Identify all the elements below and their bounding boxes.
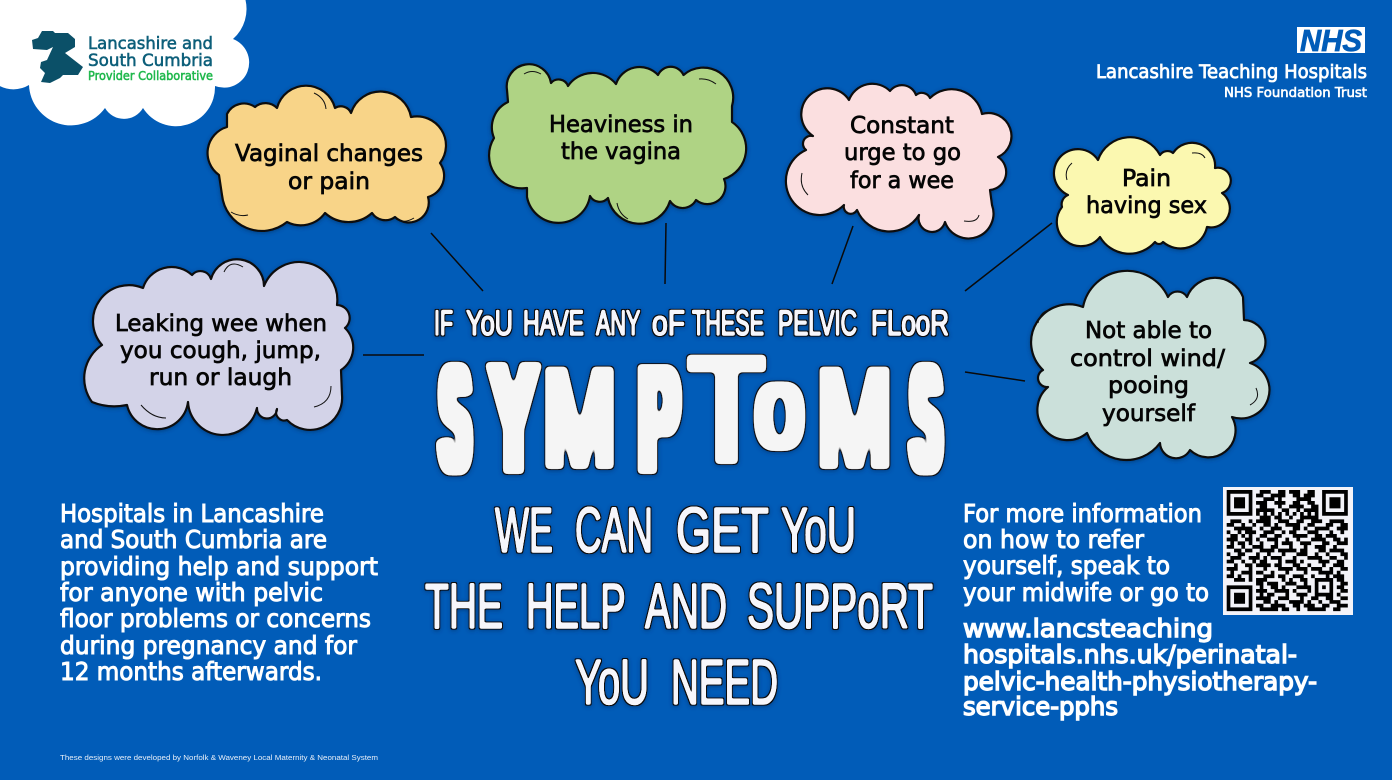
bubble: pain having sex: having sex: [1086, 191, 1207, 219]
heading: if you have any of these pelvic floor: PELVIC: [778, 304, 857, 343]
text block: website address: hospitals.nhs.uk/perinatal-: [963, 640, 1297, 669]
bubble: not able to control wind / pooing yourself: pooing: [1108, 371, 1189, 399]
QR code: [1223, 487, 1353, 615]
trust name: Lancashire Teaching Hospitals: [1096, 61, 1367, 83]
message: we can get you the help and support you need: YoU: [575, 646, 649, 718]
message: we can get you the help and support you need: CAN: [575, 494, 653, 566]
connector lines: [363, 223, 1052, 381]
bubble: leaking wee: run or laugh: [149, 363, 292, 391]
heading: if you have any of these pelvic floor: HAVE: [523, 304, 584, 343]
bubble: constant urge to go for a wee: for a wee: [850, 166, 954, 194]
bubble: pain having sex: Pain: [1122, 164, 1171, 192]
message: we can get you the help and support you need: NEED: [671, 646, 778, 718]
bubble: leaking wee: you cough, jump,: [120, 336, 321, 364]
heading: if you have any of these pelvic floor: IF: [434, 304, 453, 343]
text block: website address: service-pphs: [963, 692, 1118, 721]
logo text: Provider Collaborative: [88, 68, 213, 83]
message: we can get you the help and support you need: AND: [645, 570, 727, 642]
message: we can get you the help and support you need: YoU: [781, 494, 856, 566]
text block: hospitals help and support: 12 months afterwards.: [60, 657, 322, 686]
bubble: heaviness in the vagina: Heaviness in: [549, 110, 693, 138]
logo: Lancashire and South Cumbria Provider Collaborative: [0, 0, 249, 126]
heading: symptoms: P: [639, 334, 679, 503]
logo text: South Cumbria: [88, 51, 213, 70]
bubble: not able to control wind / pooing yourself: control wind/: [1070, 344, 1225, 372]
bubble: constant urge to go for a wee: [786, 84, 1011, 238]
footnote: These designs were developed by Norfolk & Waveney Local Maternity & Neonatal System: [60, 753, 378, 762]
heading: symptoms: T: [690, 325, 763, 493]
text block: more information: your midwife or go to: [963, 578, 1209, 607]
message: we can get you the help and support you need: GET: [676, 494, 768, 566]
text: S: [911, 334, 941, 504]
text block: more information: For more information: [963, 499, 1202, 528]
heading: if you have any of these pelvic floor: YoU: [466, 304, 513, 343]
bubble: constant urge to go for a wee: urge to go: [844, 138, 961, 166]
bubble: vaginal changes or pain: Vaginal changes: [235, 139, 423, 167]
bubble: vaginal changes or pain: or pain: [288, 167, 370, 195]
text block: hospitals help and support: [60, 499, 378, 686]
heading: symptoms: o: [756, 342, 803, 472]
bubble: not able to control wind / pooing yourself: [1031, 271, 1269, 460]
bubble: pain having sex: [1054, 137, 1231, 254]
bubble: leaking wee: Leaking wee when: [115, 309, 327, 337]
heading: if you have any of these pelvic floor: oF: [652, 304, 685, 343]
bubble: heaviness in the vagina: the vagina: [561, 137, 681, 165]
heading: symptoms: M: [818, 339, 891, 496]
text block: website address: [963, 614, 1317, 721]
logo: NHS Lancashire Teaching Hospitals: [1096, 23, 1367, 101]
icon: region map: [32, 31, 83, 83]
trust subtitle: NHS Foundation Trust: [1224, 85, 1367, 101]
heading: symptoms: M: [544, 339, 615, 496]
bubble: leaking wee: [84, 259, 353, 435]
message: we can get you the help and support you need: THE: [425, 570, 503, 642]
bubble: vaginal changes or pain: [208, 86, 446, 231]
heading: if you have any of these pelvic floor: ANY: [596, 304, 640, 343]
text block: more information: yourself, speak to: [963, 551, 1170, 580]
bubble: heaviness in the vagina: [489, 64, 746, 224]
text block: hospitals help and support: floor problems or concerns: [60, 604, 371, 633]
text block: hospitals help and support: and South Cumbria are: [60, 525, 327, 554]
message: we can get you the help and support you need: HELP: [526, 570, 625, 642]
logo text: [88, 34, 213, 83]
heading: symptoms: Y: [490, 332, 537, 504]
logo text: Lancashire and: [88, 34, 213, 53]
bubble: not able to control wind / pooing yourself: yourself: [1102, 399, 1196, 427]
NHS lozenge: [1297, 27, 1365, 53]
bubble: not able to control wind / pooing yourself: Not able to: [1085, 316, 1212, 344]
message: we can get you the help and support you need: SUPPoRT: [747, 570, 933, 642]
text block: hospitals help and support: during pregnancy and for: [60, 631, 358, 660]
white logo cloud: [0, 0, 249, 126]
message: we can get you the help and support you need: WE: [495, 494, 553, 566]
text block: hospitals help and support: for anyone with pelvic: [60, 578, 323, 607]
text block: website address: pelvic-health-physiotherapy-: [963, 667, 1317, 696]
heading: if you have any of these pelvic floor: THESE: [692, 304, 764, 343]
message: we can get you the help and support you need: [425, 494, 933, 718]
NHS letters: NHS: [1300, 23, 1362, 58]
text block: more information: on how to refer: [963, 525, 1145, 554]
text block: hospitals help and support: providing help and support: [60, 552, 378, 581]
bubble: constant urge to go for a wee: Constant: [850, 111, 954, 139]
heading: if you have any of these pelvic floor: FLooR: [871, 304, 949, 343]
text block: website address: www.lancsteaching: [963, 614, 1213, 643]
text block: more information: [963, 499, 1209, 607]
text block: hospitals help and support: Hospitals in Lancashire: [60, 499, 324, 528]
heading: symptoms: S: [440, 334, 470, 504]
